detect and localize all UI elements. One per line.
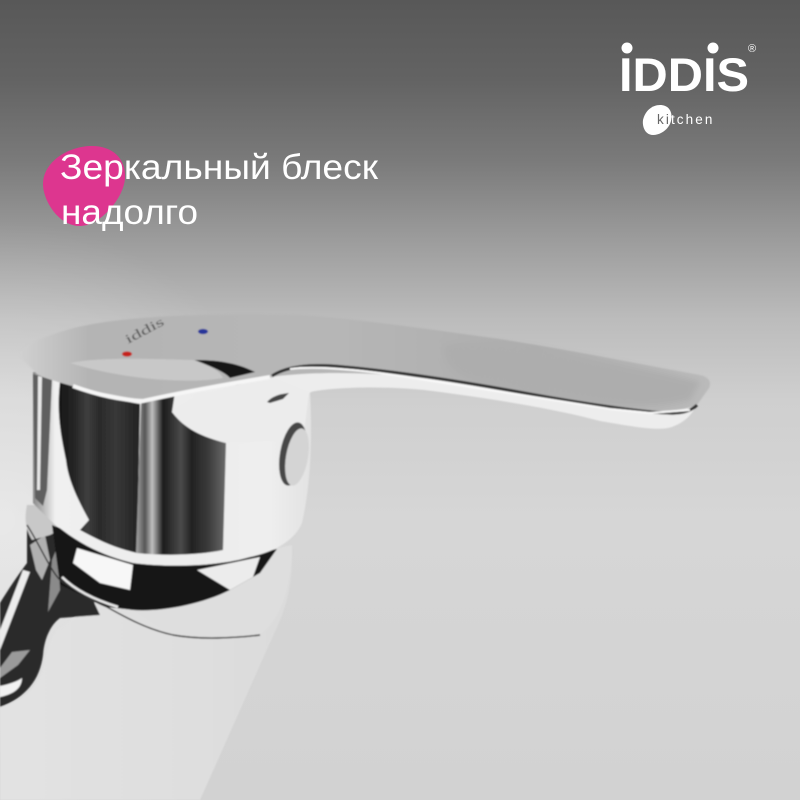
title: надолго: [61, 193, 198, 232]
collar light band under the handle: [100, 545, 292, 638]
handle top lower sheen: [70, 359, 223, 381]
cap dark reflection: [59, 382, 140, 553]
cap left edge reflection: [33, 374, 52, 506]
spout dark reflection: [0, 505, 100, 707]
black reflection on handle: [195, 360, 255, 378]
handle top darker panel: [444, 343, 700, 406]
handle lever underside: [270, 362, 697, 429]
cap top rim highlight: [73, 377, 270, 401]
chrome edge line of lever: [272, 365, 697, 413]
engraved handle logo: iddis: [122, 314, 166, 347]
kitchen label: kitchen: [657, 112, 714, 127]
cap curved chrome reflection: [136, 392, 226, 555]
faucet photo: [0, 314, 710, 800]
collar dark reflection: [52, 525, 277, 610]
handle top surface: [20, 314, 710, 411]
collar left highlight: [73, 548, 133, 590]
pivot button: [275, 420, 313, 488]
faucet trunk: [0, 545, 292, 800]
handle cap body: [33, 372, 311, 566]
small screw reflection: [267, 393, 289, 403]
collar right highlight: [197, 557, 260, 590]
white blob: [643, 105, 672, 135]
collar seam line: [27, 525, 260, 638]
wordmark: IDDIS: [619, 48, 749, 101]
pink blob accent: [43, 146, 125, 226]
dot of first i: [622, 42, 632, 54]
blue cold indicator: [198, 329, 208, 334]
background left light: [0, 220, 300, 800]
chrome edge highlight of lever: [290, 368, 690, 413]
collar seam highlight: [62, 577, 118, 607]
handle neck highlight: [172, 375, 340, 443]
registered mark: ®: [748, 43, 756, 55]
title: Зеркальный блеск: [60, 148, 379, 187]
logo: iddis kitchen: [619, 42, 756, 135]
dot of second i: [708, 42, 718, 54]
red hot indicator: [122, 351, 132, 357]
